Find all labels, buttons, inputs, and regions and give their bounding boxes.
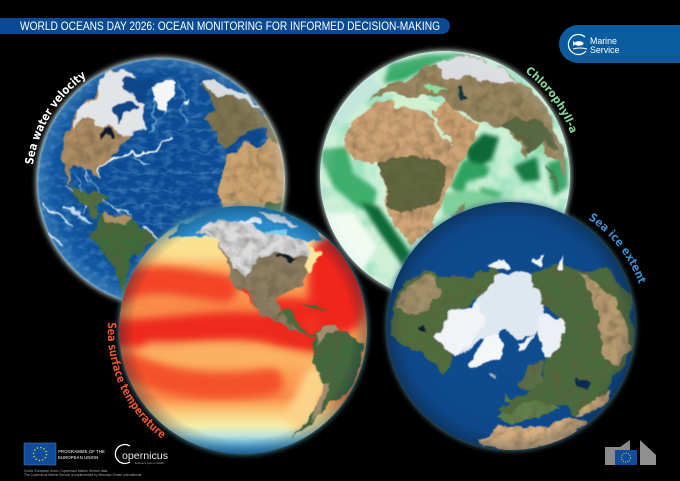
logo: Marine Service: Marine bbox=[590, 36, 617, 46]
land: caribbean islands bbox=[302, 303, 328, 309]
land: scandinavia bbox=[518, 361, 545, 391]
globe map bbox=[37, 58, 293, 306]
land: uk bbox=[503, 392, 512, 404]
land: sumatra islands bbox=[544, 164, 560, 192]
land: africa bbox=[216, 137, 285, 208]
ice patches bbox=[235, 210, 297, 227]
ice canadian bbox=[435, 303, 483, 357]
water: hudson bay pale bbox=[264, 228, 288, 236]
glow bbox=[386, 202, 636, 450]
land: arabia bbox=[431, 100, 480, 147]
glow bbox=[118, 206, 368, 454]
label: sea surface temperature: Sea surface temperature bbox=[108, 322, 165, 438]
globe: sea surface temperature bbox=[110, 206, 368, 454]
land: north america bbox=[218, 230, 308, 333]
great lakes bbox=[418, 323, 428, 332]
text: credits: Credit: European Union, Copernicus Marine Service data. bbox=[24, 469, 108, 473]
ice north siberia bbox=[538, 317, 565, 357]
glow bbox=[320, 50, 570, 302]
current swirls bbox=[67, 80, 220, 224]
water: mediterranean bbox=[393, 97, 437, 111]
logo: copernicus bbox=[115, 444, 168, 465]
chlorophyll blooms bbox=[317, 53, 568, 277]
logo: Marine Service bbox=[559, 25, 680, 63]
great lakes bbox=[101, 126, 116, 139]
land: central america bbox=[68, 182, 110, 220]
sea ice bbox=[435, 272, 547, 357]
text: programme of the european union: PROGRAMME OF THE bbox=[58, 449, 105, 454]
land: southeast asia green bbox=[500, 117, 557, 157]
land: eurasia bbox=[370, 55, 567, 180]
land: central africa bbox=[380, 157, 447, 213]
land: siberia snow bbox=[433, 56, 520, 83]
title banner: WORLD OCEANS DAY 2026: OCEAN MONITORING FOR INFORMED DECISION-MAKING bbox=[20, 19, 440, 33]
globe: chlorophyll-a bbox=[317, 50, 570, 302]
land: iceland bbox=[182, 100, 189, 105]
globe map bbox=[387, 202, 635, 453]
label: chlorophyll-a: Chlorophyll-a bbox=[526, 67, 576, 134]
water: arctic channels bbox=[120, 78, 157, 103]
land: canada snow bbox=[197, 220, 308, 277]
land: central america bbox=[277, 308, 315, 335]
land: south america bbox=[90, 212, 157, 297]
land: eurasia bbox=[497, 263, 635, 417]
globe map bbox=[110, 206, 367, 454]
logo: copernicus: Europe's eyes on Earth bbox=[135, 461, 164, 465]
land: greenland bbox=[467, 335, 505, 369]
globe: sea water velocity bbox=[36, 58, 293, 306]
label: sea ice extent: Sea ice extent bbox=[589, 213, 646, 284]
label: sea water velocity: Sea water velocity bbox=[24, 72, 86, 164]
water: caspian bbox=[577, 378, 592, 390]
land: alaska tan bbox=[395, 275, 442, 317]
land: greenland bbox=[152, 79, 177, 114]
water: pale east coast bbox=[305, 247, 320, 272]
water: arctic ocean bbox=[170, 206, 327, 243]
globe: sea ice extent bbox=[386, 202, 636, 453]
land: north america bbox=[63, 68, 148, 187]
text: programme of the european union: EUROPEAN UNION bbox=[58, 455, 98, 460]
logo: copernicus: opernicus bbox=[122, 450, 168, 462]
water: black sea bbox=[425, 85, 447, 93]
land: south america bbox=[293, 325, 364, 440]
water: hudson bay bbox=[113, 102, 138, 123]
text: credits: The Copernicus Marine Service is implemented by Mercator Ocean International bbox=[24, 473, 142, 477]
warm water bands bbox=[110, 247, 337, 417]
land: canada snow bbox=[72, 68, 149, 137]
glow bbox=[36, 58, 286, 306]
land: western europe bbox=[496, 403, 560, 423]
land: north america bbox=[390, 263, 498, 375]
logo: european commission bbox=[605, 440, 656, 465]
land: africa bbox=[476, 420, 588, 453]
water: caspian bbox=[457, 86, 468, 100]
globe map bbox=[317, 51, 570, 301]
logo: EU flag bbox=[24, 443, 56, 465]
land: svalbard bbox=[517, 333, 535, 352]
water: red sea bbox=[434, 116, 452, 142]
land: africa bbox=[343, 102, 477, 245]
great lakes bbox=[277, 253, 297, 263]
land: madagascar bbox=[453, 204, 465, 217]
streaks SW bbox=[42, 203, 160, 245]
logo: Marine Service: Service bbox=[590, 45, 619, 55]
land: central asia tan bbox=[580, 272, 632, 367]
baja red sea bbox=[242, 288, 252, 304]
water: mediterranean bbox=[233, 128, 267, 145]
land: laptev coast bbox=[487, 253, 564, 270]
land: iceland bbox=[491, 373, 498, 377]
land: europe bbox=[199, 82, 280, 150]
